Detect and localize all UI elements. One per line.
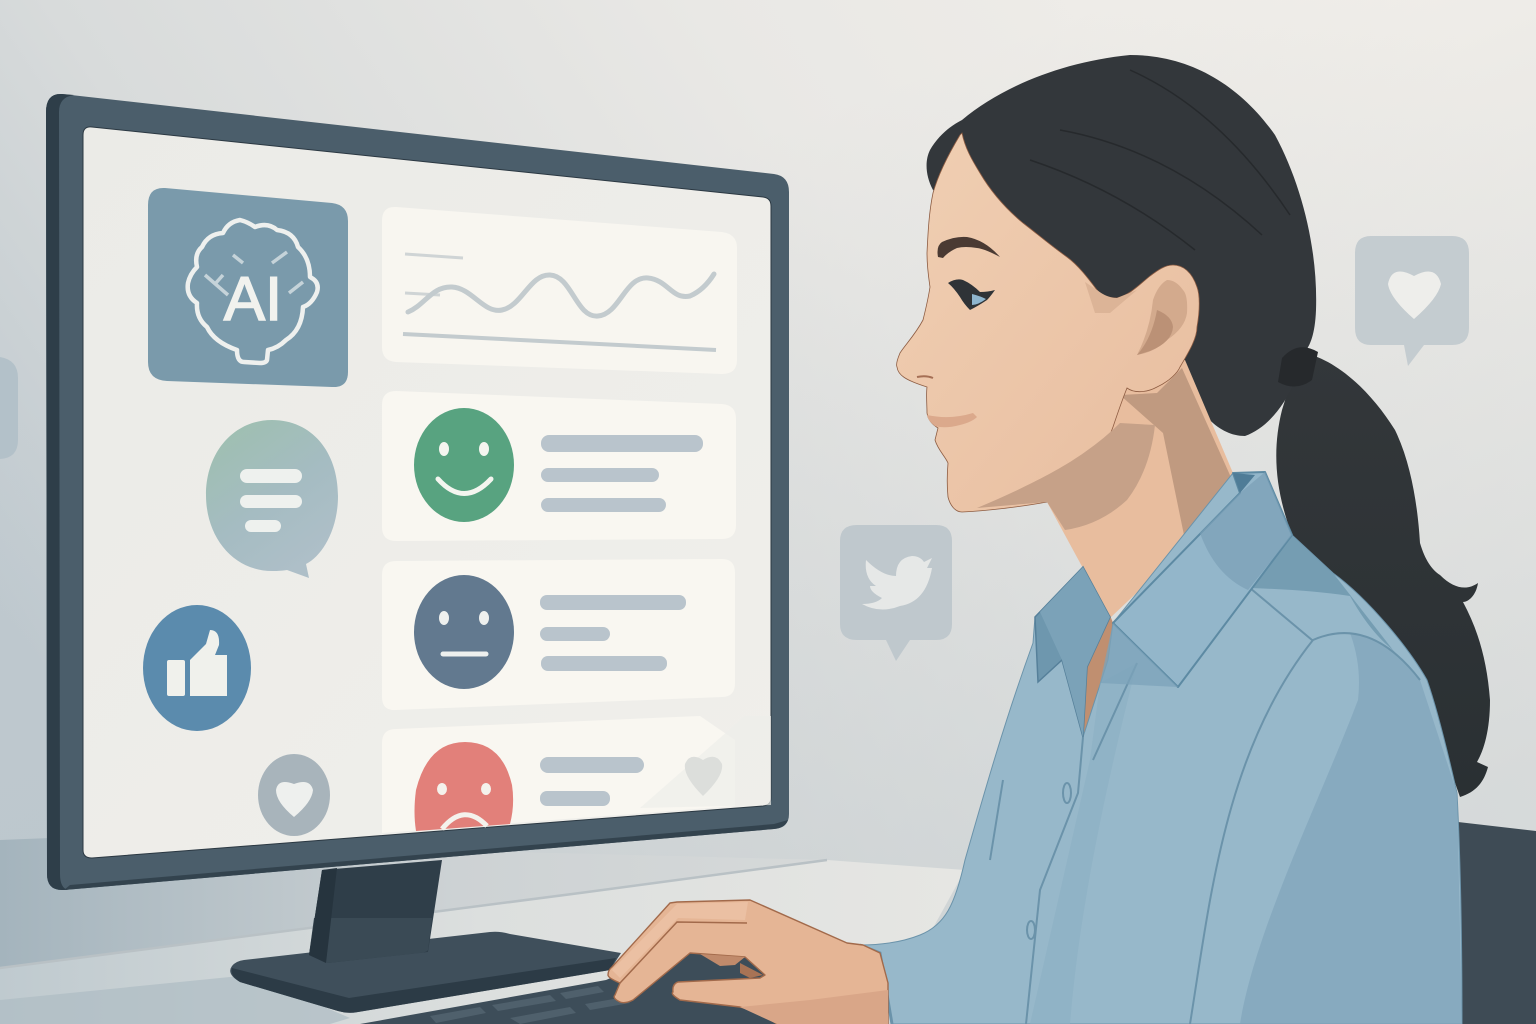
shirt seams <box>990 588 1420 1024</box>
hand <box>608 900 888 1024</box>
icon: brain outline <box>188 220 318 363</box>
AI brain tile <box>148 188 348 387</box>
monitor bezel <box>46 94 789 890</box>
ponytail <box>1276 352 1490 797</box>
lower wall band <box>0 838 827 968</box>
card: negative sentiment <box>382 716 771 833</box>
shirt shading: sleeve <box>1240 633 1462 1024</box>
shirt buttons <box>1063 783 1071 803</box>
keyboard <box>360 945 790 1024</box>
neck <box>1047 360 1240 618</box>
icon: happy face <box>414 408 514 522</box>
monitor screen <box>83 127 771 858</box>
face <box>897 133 1199 512</box>
stand base <box>230 932 621 1013</box>
icon: floating heart bubble <box>1355 236 1469 366</box>
hair strands <box>1030 70 1290 250</box>
icon: sad face <box>414 742 513 831</box>
chair back <box>1458 822 1536 1024</box>
jaw and neck shadow <box>977 423 1155 530</box>
shirt cuff <box>860 945 892 1024</box>
card: positive sentiment <box>382 391 736 541</box>
monitor stand <box>230 860 621 1013</box>
AI label: AI <box>224 265 282 334</box>
icon: floating bird bubble <box>840 525 952 661</box>
icon: heart badge <box>258 754 330 836</box>
right collar <box>1100 472 1292 687</box>
finger highlight <box>612 902 748 978</box>
ear <box>1137 280 1187 355</box>
monitor <box>46 94 789 890</box>
card: neutral sentiment <box>382 559 735 710</box>
hairline shadow <box>1085 282 1137 313</box>
shirt shading: shoulder <box>1250 535 1393 650</box>
mouth <box>927 413 977 427</box>
speech bubble icon <box>206 420 338 578</box>
desk <box>0 860 965 1024</box>
nostril <box>917 376 933 378</box>
icon: thumbs up <box>143 605 251 731</box>
hair <box>927 55 1316 436</box>
icon: partially hidden bubble at left edge <box>0 357 18 459</box>
stand neck <box>309 860 442 963</box>
inner collar skin <box>1083 615 1113 737</box>
shirt body <box>860 472 1462 1024</box>
hair tie <box>1278 347 1318 387</box>
thumb nail <box>740 963 763 978</box>
person <box>608 55 1490 1024</box>
palm underside <box>700 954 745 966</box>
eye <box>948 279 995 310</box>
chart card <box>382 207 737 374</box>
eyebrow <box>938 237 1000 258</box>
wave line chart <box>408 274 714 316</box>
left collar <box>1035 567 1110 737</box>
icon: neutral face <box>414 575 514 689</box>
